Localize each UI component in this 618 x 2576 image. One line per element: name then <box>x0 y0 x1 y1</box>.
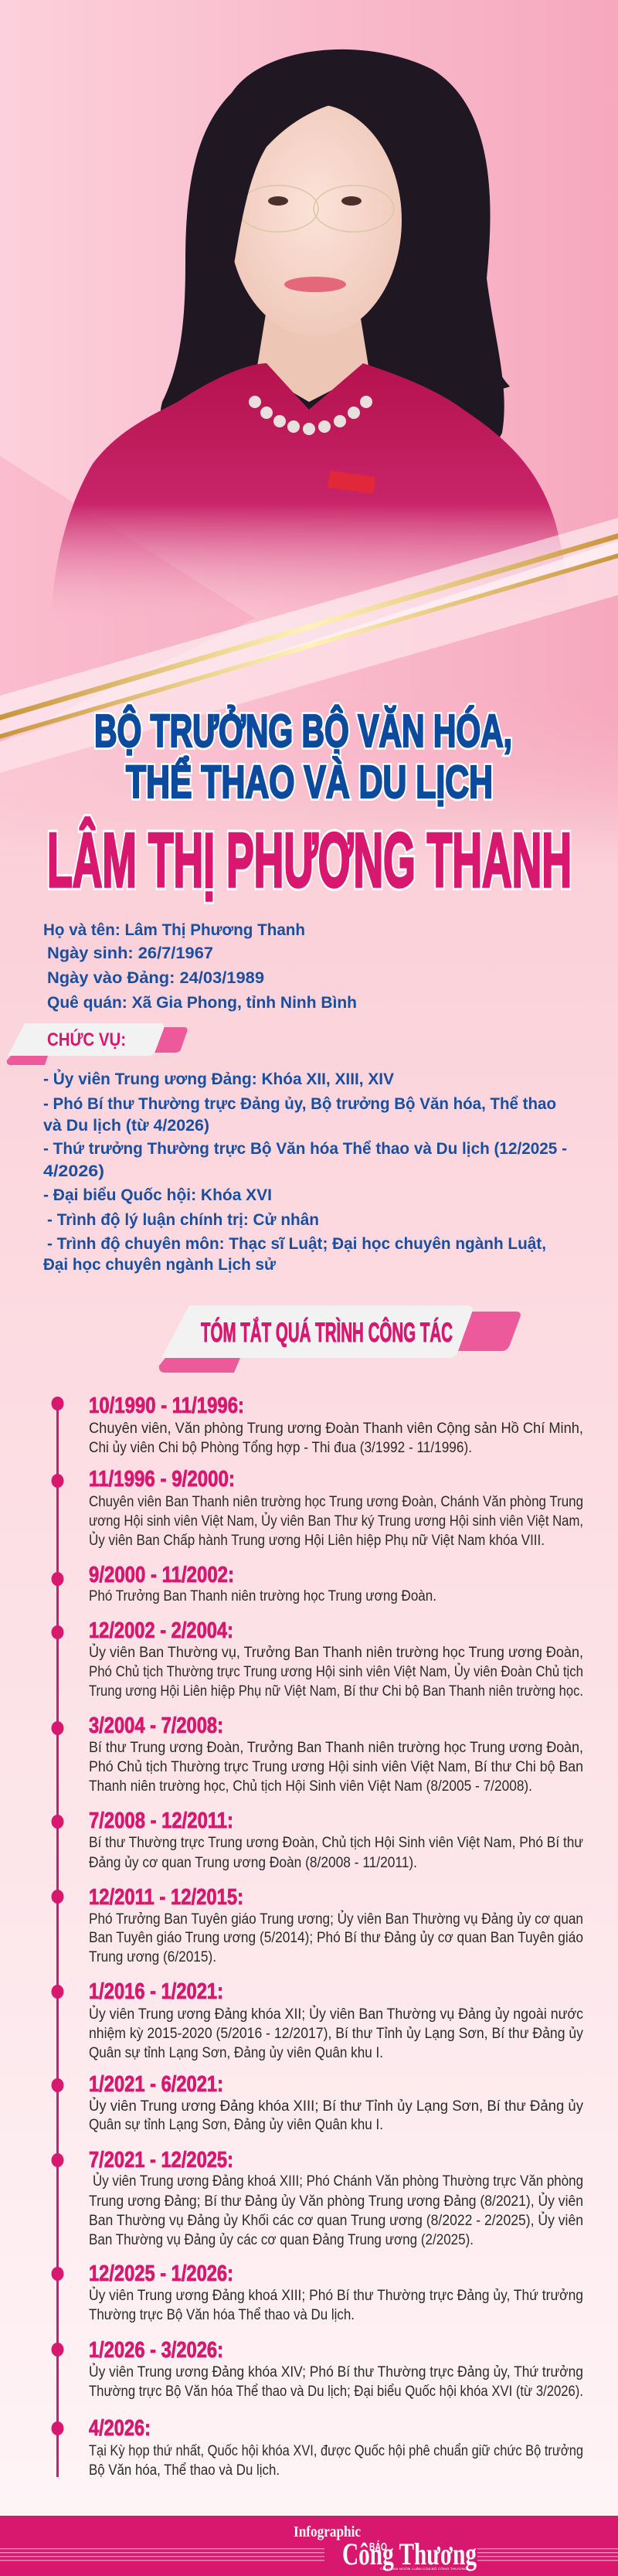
timeline entry: 7/2008 - 12/2011: 7/2008 - 12/2011: <box>89 1809 233 1833</box>
timeline entry: 12/2025 - 1/2026: Ủy viên Trung ương Đảng khoá XIII; Phó Bí thư Thường trực Đảng ủy, Thứ trưởng <box>89 2287 583 2304</box>
positions list: - Trình độ chuyên môn: Thạc sĩ Luật; Đại học chuyên ngành Luật, <box>47 1235 546 1253</box>
timeline entry: 7/2021 - 12/2025 <box>51 2148 583 2248</box>
timeline entry: 9/2000 - 11/2002 <box>51 1563 436 1604</box>
positions list: - Đại biểu Quốc hội: Khóa XVI <box>43 1186 272 1204</box>
glasses <box>238 185 394 232</box>
timeline entry: 1/2016 - 1/2021: Quân sự tỉnh Lạng Sơn, Đảng ủy viên Quân khu I. <box>89 2045 383 2061</box>
necklace <box>249 396 372 435</box>
timeline entry: 3/2004 - 7/2008: 3/2004 - 7/2008: <box>89 1713 223 1738</box>
title: position: THỂ THAO VÀ DU LỊCH <box>126 757 493 808</box>
hair back <box>160 49 504 473</box>
timeline line <box>56 1404 59 2477</box>
timeline entry: 3/2004 - 7/2008: Thanh niên trường học, Chủ tịch Hội Sinh viên Việt Nam (8/2005 - 7/2008). <box>89 1778 532 1795</box>
positions list: - Ủy viên Trung ương Đảng: Khóa XII, XIII, XIV <box>43 1070 394 1088</box>
timeline entry: 1/2016 - 1/2021: nhiệm kỳ 2015-2020 (5/2016 - 12/2017), Bí thư Tỉnh ủy Lạng Sơn, Bí thư Đảng ủy <box>89 2026 583 2042</box>
timeline entry: 12/2011 - 12/2015: Trung ương (6/2015). <box>89 1949 216 1965</box>
logo: CƠ QUAN NGÔN LUẬN CỦA BỘ CÔNG THƯƠNG <box>380 2567 467 2571</box>
logo: BÁO <box>369 2540 387 2554</box>
timeline entry: 12/2011 - 12/2015: 12/2011 - 12/2015: <box>89 1885 243 1910</box>
dress <box>51 363 572 618</box>
title: position: THỂ THAO VÀ DU LỊCH <box>126 757 493 808</box>
personal info: Quê quán: Xã Gia Phong, tỉnh Ninh Bình <box>47 994 357 1012</box>
logo: Infographic <box>294 2523 361 2540</box>
timeline entry: 1/2021 - 6/2021 <box>51 2072 583 2133</box>
timeline entry: 1/2021 - 6/2021: 1/2021 - 6/2021: <box>89 2072 223 2097</box>
timeline entry: 4/2026: 4/2026: <box>89 2416 151 2441</box>
personal info: Họ và tên: Lâm Thị Phương Thanh <box>43 921 305 939</box>
neck <box>256 309 369 402</box>
timeline entry: 12/2002 - 2/2004: Ủy viên Ban Thường vụ, Trưởng Ban Thanh niên trường học Trung ương Đoàn, <box>89 1644 583 1661</box>
timeline entry: 7/2008 - 12/2011 <box>51 1809 583 1871</box>
lips <box>284 277 346 292</box>
logo: Công Thương <box>342 2537 477 2571</box>
timeline entry: 12/2002 - 2/2004: 12/2002 - 2/2004: <box>89 1618 233 1643</box>
portrait photo <box>51 49 572 618</box>
banner: tóm tắt quá trình công tác <box>159 1305 521 1373</box>
title: position <box>94 705 512 808</box>
timeline entry: 1/2021 - 6/2021: Quân sự tỉnh Lạng Sơn, Đảng ủy viên Quân khu I. <box>89 2117 383 2133</box>
timeline entry: 10/1990 - 11/1996: Chuyên viên, Văn phòng Trung ương Đoàn Thanh viên Cộng sản Hồ Chí Minh, <box>89 1421 583 1437</box>
timeline entry: 12/2025 - 1/2026: Thường trực Bộ Văn hóa Thể thao và Du lịch. <box>89 2307 355 2323</box>
positions list: và Du lịch (từ 4/2026) <box>43 1117 209 1135</box>
positions list: - Thứ trưởng Thường trực Bộ Văn hóa Thể thao và Du lịch (12/2025 - <box>43 1140 567 1158</box>
positions list: Đại học chuyên ngành Lịch sử <box>43 1256 277 1274</box>
positions list <box>43 1070 567 1274</box>
timeline entry: 11/1996 - 9/2000 <box>51 1467 583 1549</box>
timeline entry: 10/1990 - 11/1996: 10/1990 - 11/1996: <box>89 1393 244 1418</box>
banner: chức vụ: CHỨC VỤ: <box>47 1029 126 1050</box>
badge <box>328 471 375 494</box>
decorative gold ribbons <box>0 518 618 773</box>
timeline entry: 1/2016 - 1/2021: Ủy viên Trung ương Đảng khóa XII; Ủy viên Ban Thường vụ Đảng ủy ngoài nước <box>89 2006 583 2023</box>
timeline entry: 1/2016 - 1/2021 <box>51 1979 583 2061</box>
timeline entry: 4/2026: Bộ Văn hóa, Thể thao và Du lịch. <box>89 2462 280 2479</box>
timeline entry: 10/1990 - 11/1996: Chi ủy viên Chi bộ Phòng Tổng hợp - Thi đua (3/1992 - 11/1996). <box>89 1440 472 1456</box>
timeline entry: 9/2000 - 11/2002: Phó Trưởng Ban Thanh niên trường học Trung ương Đoàn. <box>89 1588 436 1604</box>
timeline entry: 12/2025 - 1/2026: 12/2025 - 1/2026: <box>89 2261 233 2286</box>
timeline entry: 7/2021 - 12/2025: Ban Thường vụ Đảng ủy Khối các cơ quan Trung ương (8/2022 - 2/2025), Ủy viên <box>89 2212 583 2229</box>
timeline entry: 3/2004 - 7/2008 <box>51 1713 583 1795</box>
timeline entry: 7/2021 - 12/2025: Trung ương Đảng; Bí thư Đảng ủy Văn phòng Trung ương Đảng (8/2021), Ủy viên <box>89 2193 583 2210</box>
eyes <box>268 196 288 206</box>
timeline entry: 12/2011 - 12/2015: Ban Tuyên giáo Trung ương (5/2014); Phó Bí thư Đảng ủy cơ quan Ban Tuyên giáo <box>89 1930 583 1946</box>
personal info: Ngày vào Đảng: 24/03/1989 <box>47 969 264 987</box>
positions list: - Trình độ lý luận chính trị: Cử nhân <box>47 1211 319 1229</box>
timeline entry: 11/1996 - 9/2000: 11/1996 - 9/2000: <box>89 1467 235 1492</box>
face <box>229 104 402 336</box>
timeline entry: 3/2004 - 7/2008: Phó Chủ tịch Thường trực Trung ương Hội sinh viên Việt Nam, Bí thư Chi bộ Ban <box>89 1759 583 1775</box>
timeline entry: 1/2026 - 3/2026 <box>51 2338 583 2400</box>
dotted pattern <box>0 2548 618 2561</box>
banner: tóm tắt quá trình công tác: TÓM TẮT QUÁ TRÌNH CÔNG TÁC <box>201 1317 453 1348</box>
timeline entry: 11/1996 - 9/2000: Ủy viên Ban Chấp hành Trung ương Hội Liên hiệp Phụ nữ Việt Nam khóa VIII. <box>89 1532 545 1549</box>
timeline entry: 9/2000 - 11/2002: 9/2000 - 11/2002: <box>89 1563 234 1587</box>
hair front <box>178 70 402 371</box>
timeline entry: 12/2002 - 2/2004 <box>51 1618 583 1700</box>
timeline entry: 7/2008 - 12/2011: Bí thư Thường trực Trung ương Đoàn, Chủ tịch Hội Sinh viên Việt Nam, Phó Bí thư <box>89 1835 583 1851</box>
personal info <box>43 921 357 1012</box>
footer band <box>0 2516 618 2576</box>
logo <box>294 2523 477 2571</box>
timeline entry: 1/2026 - 3/2026: 1/2026 - 3/2026: <box>89 2338 223 2363</box>
timeline entry: 3/2004 - 7/2008: Bí thư Trung ương Đoàn, Trưởng Ban Thanh niên trường học Trung ương Đoàn, <box>89 1740 583 1756</box>
timeline entry: 4/2026 <box>51 2416 583 2479</box>
positions list: 4/2026) <box>43 1162 104 1180</box>
timeline entry: 1/2021 - 6/2021: Ủy viên Trung ương Đảng khóa XIII; Bí thư Tỉnh ủy Lạng Sơn, Bí thư Đảng ủy <box>89 2098 583 2115</box>
timeline entry: 7/2021 - 12/2025: Ban Thường vụ Đảng ủy các cơ quan Đảng Trung ương (2/2025). <box>89 2232 474 2248</box>
timeline entry: 10/1990 - 11/1996 <box>51 1393 583 1456</box>
positions list: - Phó Bí thư Thường trực Đảng ủy, Bộ trưởng Bộ Văn hóa, Thể thao <box>43 1095 556 1113</box>
timeline entry: 7/2008 - 12/2011: Đảng ủy cơ quan Trung ương Đoàn (8/2008 - 11/2011). <box>89 1855 417 1871</box>
timeline entry: 12/2025 - 1/2026 <box>51 2261 583 2323</box>
timeline entry: 1/2016 - 1/2021: 1/2016 - 1/2021: <box>89 1979 223 2004</box>
personal info: Ngày sinh: 26/7/1967 <box>47 944 213 962</box>
timeline entry: 12/2011 - 12/2015 <box>51 1885 583 1965</box>
timeline entry: 7/2021 - 12/2025: 7/2021 - 12/2025: <box>89 2148 233 2173</box>
banner: chức vụ <box>7 1023 187 1065</box>
timeline entry: 1/2026 - 3/2026: Ủy viên Trung ương Đảng khóa XIV; Phó Bí thư Thường trực Đảng ủy, Thứ trưởng <box>89 2363 583 2380</box>
